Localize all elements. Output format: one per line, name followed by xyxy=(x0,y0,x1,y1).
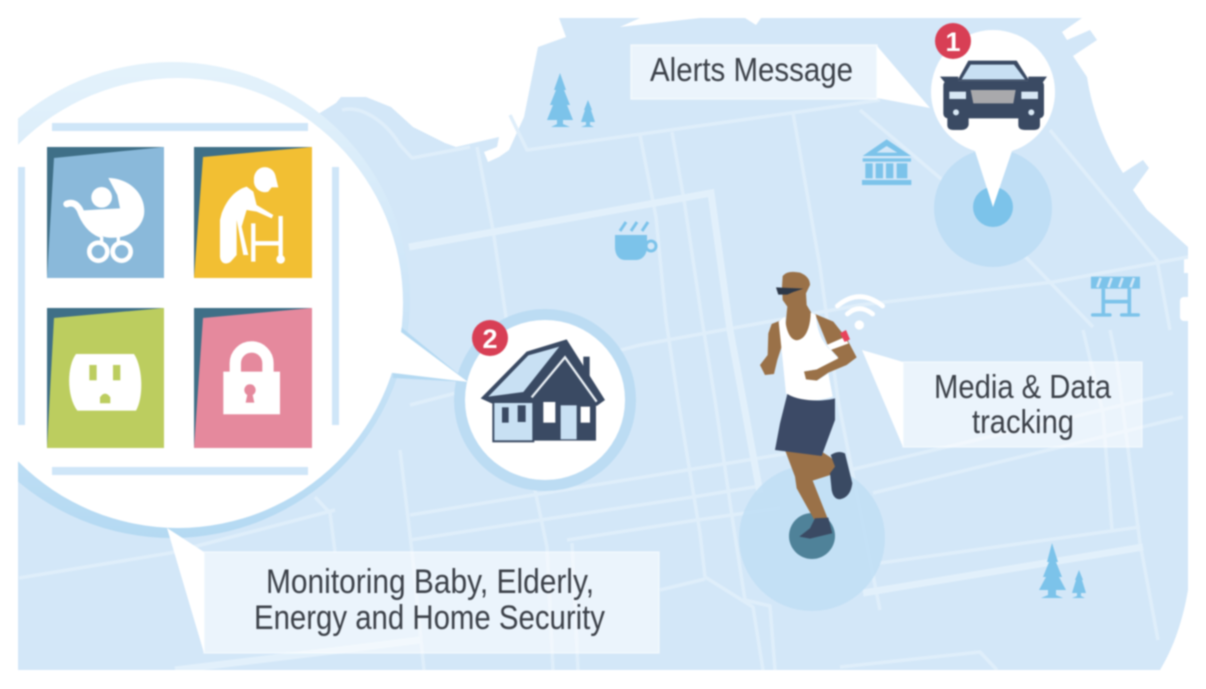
callout: alerts message xyxy=(631,45,930,108)
callout: monitoring: Monitoring Baby, Elderly, xyxy=(266,563,594,601)
icon: trees upper xyxy=(547,73,595,127)
icon: road barrier xyxy=(1091,277,1140,315)
callout: media and data tracking: tracking xyxy=(972,403,1074,440)
pointer to house xyxy=(393,328,458,382)
icon: coffee cup xyxy=(615,222,656,260)
icon: car xyxy=(940,61,1047,130)
badge: number 2 xyxy=(472,320,508,356)
location radius xyxy=(934,149,1052,267)
location circles under runner xyxy=(739,465,885,611)
callout: monitoring: Energy and Home Security xyxy=(254,599,605,637)
magnifier disc xyxy=(0,78,403,528)
runner shoes xyxy=(799,452,852,539)
runner back leg xyxy=(785,450,840,519)
runner head and torso skin xyxy=(782,272,817,350)
runner right arm xyxy=(803,314,857,381)
pointer highlight xyxy=(392,332,468,382)
runner shorts xyxy=(775,394,835,456)
panel: home circle xyxy=(454,309,636,491)
tile: baby monitoring xyxy=(47,147,164,278)
location centre xyxy=(973,187,1013,227)
figure: runner xyxy=(760,272,883,539)
callout: media and data tracking: Media & Data xyxy=(934,368,1112,405)
icon: wifi signal xyxy=(837,297,883,330)
tile: energy monitoring xyxy=(47,308,164,448)
sunglasses xyxy=(776,287,803,295)
runner tank top xyxy=(779,313,838,400)
icon: bank xyxy=(862,139,911,185)
badge: number 2: 2 xyxy=(482,324,498,354)
callout: alerts message: Alerts Message xyxy=(650,51,853,88)
badge: number 1 xyxy=(935,23,971,59)
tile: elderly monitoring xyxy=(194,147,312,278)
pin xyxy=(931,30,1055,207)
runner left arm xyxy=(760,321,782,375)
callout: media and data tracking xyxy=(862,350,1142,447)
panel: monitoring magnifier xyxy=(0,62,468,538)
badge: number 1: 1 xyxy=(945,27,961,57)
magnifier ring xyxy=(0,62,410,538)
icon: trees lower xyxy=(1039,543,1086,598)
armband xyxy=(827,330,850,350)
panel: car location pin xyxy=(931,23,1055,267)
tile: home security xyxy=(194,308,312,448)
icon: house xyxy=(481,339,605,441)
frame bars xyxy=(18,123,339,475)
callout: monitoring xyxy=(167,528,659,653)
